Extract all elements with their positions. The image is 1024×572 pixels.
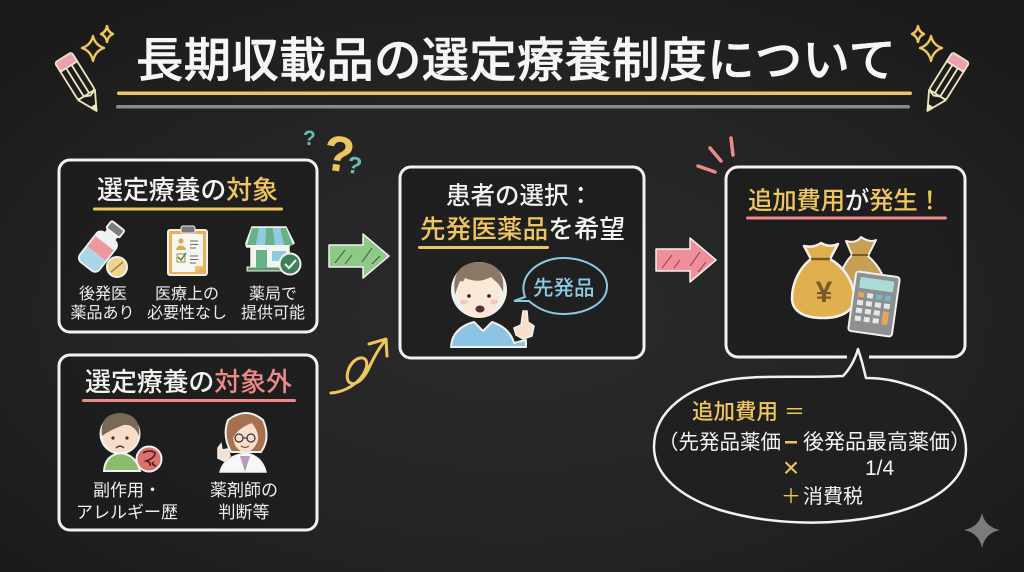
icon: money bags: ¥: [816, 276, 833, 309]
label: side effects and allergy history: アレルギー歴: [76, 503, 178, 522]
icon: left pencil: [55, 52, 105, 116]
title: 長期収載品の選定療養制度について: [136, 35, 896, 88]
icon: right pencil: [919, 52, 969, 116]
heading: patient's choice: 患者の選択：: [446, 182, 593, 210]
label: generic available: [70, 285, 135, 322]
label: pharmacy can supply: 薬局で: [249, 285, 297, 303]
label: generic available: 後発医: [79, 285, 127, 303]
label: pharmacist judgement: 判断等: [218, 503, 270, 522]
callout: formula: 追加費用: [692, 400, 778, 424]
title: [116, 35, 912, 108]
panel: target conditions: [59, 160, 317, 332]
icon: pharmacist: [218, 413, 267, 472]
label: side effects and allergy history: 副作用・: [93, 481, 161, 500]
icon: watermark sparkle: [964, 513, 1000, 548]
label: no medical need: [147, 285, 227, 322]
heading: wants brand-name drug: 先発医薬品を希望: [420, 216, 625, 244]
heading: excluded: 選定療養の対象外: [85, 367, 292, 397]
label: side effects and allergy history: [76, 481, 178, 522]
label: pharmacist judgement: [210, 481, 278, 522]
callout: formula: ＋: [781, 486, 801, 508]
label: generic available: 薬品あり: [70, 304, 135, 322]
callout: formula: 消費税: [803, 485, 863, 508]
panel: patient choice: [400, 167, 644, 358]
callout: formula: ×: [783, 452, 799, 483]
label: pharmacy can supply: [241, 285, 305, 322]
icon: patient with allergy: [100, 413, 162, 472]
icon: right sparkles: [912, 26, 942, 61]
arrow: curly yellow: [331, 339, 387, 393]
arrow: pink: [656, 238, 716, 282]
label: pharmacist judgement: 薬剤師の: [210, 481, 278, 500]
callout: formula: 1/4: [865, 457, 895, 480]
panel: excluded conditions: [59, 355, 317, 530]
icon: money bags: [792, 237, 886, 318]
heading: additional cost incurred: 追加費用が発生！: [748, 187, 942, 215]
arrow: green: [329, 234, 389, 278]
icon: patient pointing: [451, 262, 534, 347]
callout: formula: 後発品最高薬価）: [803, 431, 971, 454]
callout: formula: （先発品薬価: [658, 431, 781, 454]
icon: question marks: [303, 124, 364, 184]
icon: question marks: ?: [320, 124, 358, 184]
icon: question marks: ?: [344, 151, 364, 181]
label: no medical need: 医療上の: [155, 285, 219, 303]
icon: clipboard: [168, 226, 207, 275]
speech bubble: brand-name: [514, 258, 607, 314]
callout: formula: ＝: [784, 401, 805, 424]
panel: additional cost: [726, 167, 965, 357]
icon: question marks: ?: [303, 127, 316, 150]
icon: pink emphasis rays: [698, 138, 733, 172]
icon: pharmacy store: [246, 227, 300, 274]
label: no medical need: 必要性なし: [147, 304, 227, 322]
label: pharmacy can supply: 提供可能: [241, 304, 305, 322]
heading: target: 選定療養の対象: [97, 175, 278, 205]
speech bubble: brand-name: 先発品: [533, 277, 594, 300]
callout: formula: [654, 349, 971, 523]
icon: calculator: [848, 271, 900, 337]
icon: left sparkles: [82, 26, 113, 61]
icon: bottle and pill: [77, 218, 128, 277]
